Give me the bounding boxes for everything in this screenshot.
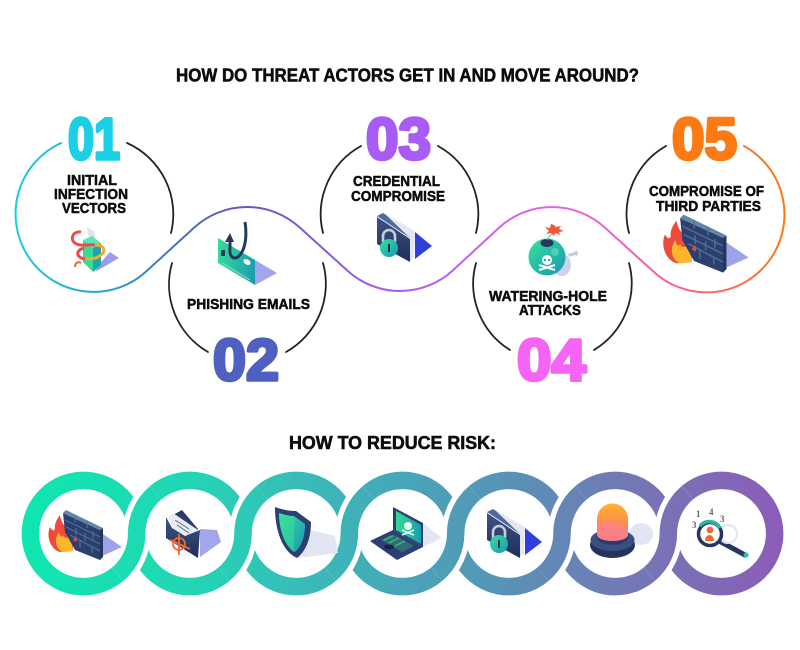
icon: skull bomb xyxy=(528,224,578,276)
step 03 xyxy=(351,107,445,262)
icon: laptop with skull xyxy=(370,507,442,560)
icon: envelope with target xyxy=(166,510,221,558)
number 05: 05 xyxy=(672,107,737,172)
label: initial infection vectors: INFECTION xyxy=(54,187,128,203)
icon: magnifier with numbers: 3 xyxy=(720,514,725,524)
label: compromise of third parties xyxy=(649,184,764,215)
label: initial infection vectors: VECTORS xyxy=(62,201,126,217)
label: phishing emails: PHISHING EMAILS xyxy=(187,297,310,313)
icon: magnifier with numbers xyxy=(692,507,748,558)
icon: magnifier with numbers: 4 xyxy=(709,507,714,517)
heading: how to reduce risk: HOW TO REDUCE RISK: xyxy=(289,433,496,453)
interlocking risk rings xyxy=(30,480,775,587)
gradient wave line xyxy=(16,143,784,292)
label: watering-hole attacks xyxy=(489,289,607,319)
icon: magnifier with numbers: 1 xyxy=(696,509,701,519)
number 01: 01 xyxy=(68,107,120,172)
black circle arcs xyxy=(127,143,666,352)
icon: usb with snake xyxy=(72,227,119,272)
step 04 xyxy=(489,224,607,393)
icon: firewall xyxy=(48,510,122,560)
icon: locked folder xyxy=(377,213,432,262)
icon: magnifier with numbers: 3 xyxy=(692,520,697,530)
step 01 xyxy=(54,107,128,272)
label: initial infection vectors xyxy=(54,173,128,217)
label: watering-hole attacks: WATERING-HOLE xyxy=(489,289,607,305)
label: credential compromise: CREDENTIAL xyxy=(353,174,440,190)
number 04: 04 xyxy=(517,328,586,393)
icon: locked folder xyxy=(487,509,542,558)
label: credential compromise xyxy=(351,174,445,205)
number 02: 02 xyxy=(213,328,279,393)
label: compromise of third parties: COMPROMISE OF xyxy=(649,184,764,200)
number 03: 03 xyxy=(366,107,431,172)
title: HOW DO THREAT ACTORS GET IN AND MOVE AROUND? xyxy=(176,66,639,86)
step 02 xyxy=(187,222,310,393)
icon: burning firewall xyxy=(663,215,749,273)
label: credential compromise: COMPROMISE xyxy=(351,189,445,205)
label: compromise of third parties: THIRD PARTIES xyxy=(656,199,761,215)
step 05 xyxy=(649,107,764,273)
icon: alarm light xyxy=(590,504,653,558)
label: watering-hole attacks: ATTACKS xyxy=(519,303,581,319)
icon: shield xyxy=(275,507,338,558)
label: initial infection vectors: INITIAL xyxy=(67,173,117,189)
icon: hook and card xyxy=(218,222,277,285)
